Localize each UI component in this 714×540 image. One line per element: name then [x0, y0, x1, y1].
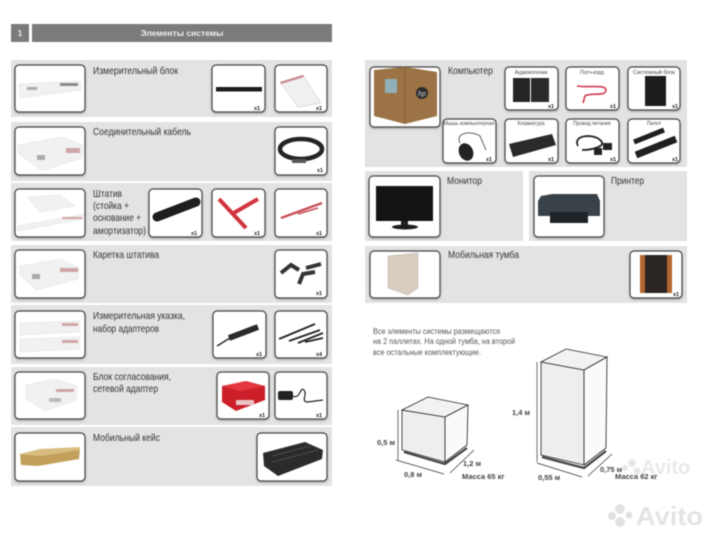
pallet diagram: small: Масса 65 кг	[462, 472, 505, 481]
mouse: Мышь компьютерная	[444, 121, 495, 127]
panel: connecting cable: Соединительный кабель	[93, 126, 191, 138]
panel: measuring unit	[11, 60, 332, 117]
speakers: Аудиоколонки	[515, 70, 547, 76]
text: palette note: все остальные комплектующие.	[373, 348, 481, 357]
section number badge: 1	[18, 29, 23, 38]
panel: measuring unit: x1	[316, 106, 322, 112]
system unit: Системный блок	[633, 69, 676, 76]
panel: tripod carriage: Каретка штатива	[93, 249, 159, 261]
mouse: x1	[486, 157, 492, 163]
power cord: x1	[610, 157, 616, 163]
panel: tripod: основание +	[93, 212, 141, 224]
power strip	[628, 119, 680, 163]
panel: mobile case: Мобильный кейс	[93, 432, 160, 444]
power cord	[566, 119, 619, 163]
text: palette note: на 2 паллетах. На одной тумба, на второй	[373, 337, 515, 346]
panel: connecting cable	[11, 122, 332, 181]
pallet diagram: small	[377, 397, 505, 481]
patch cord: Патч-корд	[580, 70, 604, 76]
panel: matching unit and power adapter: Блок согласования,	[93, 371, 171, 383]
panel: measuring unit: Измерительный блок	[93, 65, 178, 77]
panel: tripod: x1	[191, 231, 197, 237]
section title bar	[32, 24, 332, 42]
pallet diagram: tall: 0,55 м	[538, 473, 561, 482]
keyboard: x1	[548, 157, 554, 163]
patch cord	[566, 67, 619, 110]
panel: mobile cabinet: Мобильная тумба	[448, 249, 519, 261]
speakers: x1	[548, 104, 554, 110]
panel: tripod: амортизатор)	[93, 225, 146, 237]
panel: matching unit and power adapter: сетевой адаптер	[93, 383, 158, 395]
panel: tripod: x1	[254, 231, 260, 237]
pallet diagram: small: 0,8 м	[404, 470, 423, 479]
watermark: lower Avito	[608, 501, 703, 531]
panel: printer	[529, 171, 687, 241]
panel: matching unit and power adapter: x1	[259, 413, 265, 419]
text: palette note: Все элементы системы размещаются	[373, 327, 500, 336]
panel: measuring pointer and adapters: x1	[256, 352, 262, 358]
panel: monitor	[365, 171, 523, 241]
pallet diagram: tall: 0,75 м	[600, 465, 623, 474]
panel: mobile cabinet	[365, 246, 687, 303]
keyboard	[505, 119, 558, 163]
panel: tripod: x1	[316, 231, 322, 237]
panel: matching unit and power adapter	[11, 367, 332, 425]
panel: tripod	[11, 183, 332, 241]
pallet diagram: tall: 1,4 м	[512, 408, 531, 417]
computer box photo	[370, 67, 440, 127]
section title bar: Элементы системы	[141, 28, 223, 38]
panel: monitor: Монитор	[447, 175, 482, 187]
watermark: lower Avito: Avito	[636, 501, 703, 531]
speakers	[505, 67, 558, 110]
panel: computer: Компьютер	[448, 65, 493, 77]
system unit: x1	[672, 104, 678, 110]
panel: tripod: (стойка +	[93, 200, 129, 212]
panel: tripod: Штатив	[93, 188, 122, 200]
watermark: upper Avito: Avito	[641, 457, 690, 479]
system unit	[628, 67, 680, 110]
pallet diagram: tall: Масса 62 кг	[615, 472, 658, 481]
keyboard: Клавиатура	[517, 121, 545, 127]
panel: tripod carriage	[11, 245, 332, 303]
text: palette note	[373, 327, 515, 357]
pallet diagram: small: 0,5 м	[377, 438, 396, 447]
panel: measuring unit: x1	[254, 106, 260, 112]
pallet diagram: tall	[512, 349, 658, 482]
computer box photo: hp	[418, 91, 426, 98]
panel: measuring pointer and adapters: Измерительная указка,	[93, 310, 185, 322]
panel: connecting cable: x1	[317, 168, 323, 174]
patch cord: x1	[610, 104, 616, 110]
panel: matching unit and power adapter: x1	[316, 413, 322, 419]
power cord: Провод питания	[573, 121, 611, 127]
panel: measuring pointer and adapters: x4	[316, 352, 323, 358]
panel: mobile case	[11, 427, 332, 486]
panel: computer	[365, 60, 687, 167]
pallet diagram: small: 1,2 м	[463, 459, 482, 468]
mouse	[443, 119, 496, 163]
panel: measuring pointer and adapters: набор адаптеров	[93, 323, 159, 335]
panel: tripod carriage: x1	[316, 291, 322, 297]
panel: mobile cabinet: x1	[673, 292, 679, 298]
section number badge	[11, 24, 29, 42]
power strip: Пилот	[647, 121, 662, 127]
power strip: x1	[672, 157, 678, 163]
panel: measuring pointer and adapters	[11, 305, 332, 364]
panel: printer: Принтер	[611, 175, 644, 187]
